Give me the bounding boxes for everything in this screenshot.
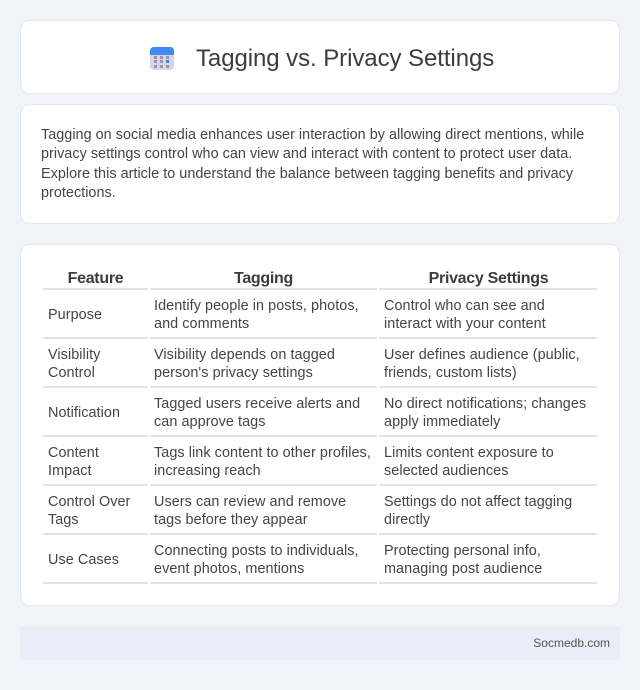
- row: Visibility Control: Control: [48, 365, 95, 381]
- icon: calendar: [150, 47, 174, 70]
- row: Use Cases: Use Cases: [48, 552, 119, 568]
- intro text: Tagging on social media enhances user interaction by allowing direct mentions, while: [41, 127, 584, 143]
- row: Content Impact: [48, 445, 554, 479]
- panel: intro: [20, 104, 620, 224]
- row: Control Over Tags: directly: [384, 512, 430, 528]
- row: Content Impact: Impact: [48, 463, 92, 479]
- intro text: Explore this article to understand the balance between tagging benefits and privacy: [41, 166, 573, 182]
- row: Notification: [48, 396, 586, 430]
- row: Purpose: and comments: [154, 316, 249, 332]
- row: Control Over Tags: [48, 494, 572, 528]
- row: Content Impact: selected audiences: [384, 463, 508, 479]
- table header: Tagging: [234, 270, 293, 287]
- row: Visibility Control: User defines audience (public,: [384, 347, 580, 363]
- row: Control Over Tags: Tags: [48, 512, 79, 528]
- row: Notification: No direct notifications; changes: [384, 396, 586, 412]
- row: Visibility Control: Visibility depends on tagged: [154, 347, 335, 363]
- row: Use Cases: managing post audience: [384, 561, 542, 577]
- row: Visibility Control: Visibility: [48, 347, 100, 363]
- row: Purpose: Purpose: [48, 307, 102, 323]
- panel: title card: [20, 20, 620, 94]
- row: Use Cases: Connecting posts to individuals,: [154, 543, 359, 559]
- row: Notification: Tagged users receive alerts and: [154, 396, 360, 412]
- row: Visibility Control: person's privacy settings: [154, 365, 313, 381]
- footer credit: Socmedb.com: [533, 636, 610, 650]
- row: Content Impact: Content: [48, 445, 99, 461]
- row: Notification: can approve tags: [154, 414, 266, 430]
- table header: Feature: [68, 270, 123, 287]
- row: Control Over Tags: Users can review and remove: [154, 494, 346, 510]
- footer bar: [20, 626, 620, 660]
- table header: [68, 270, 548, 287]
- row: Use Cases: [48, 543, 542, 577]
- row: Purpose: interact with your content: [384, 316, 546, 332]
- row: Content Impact: increasing reach: [154, 463, 261, 479]
- row: Use Cases: Protecting personal info,: [384, 543, 541, 559]
- row: Purpose: Identify people in posts, photos,: [154, 298, 359, 314]
- row: Notification: apply immediately: [384, 414, 500, 430]
- row: Use Cases: event photos, mentions: [154, 561, 304, 577]
- row: Visibility Control: friends, custom lists): [384, 365, 517, 381]
- row: Purpose: [48, 298, 546, 332]
- table: [68, 270, 548, 287]
- row: Notification: Notification: [48, 405, 120, 421]
- title: Tagging vs. Privacy Settings: [196, 45, 494, 72]
- intro text: privacy settings control who can view and interact with content to protect user data.: [41, 146, 572, 162]
- table header: Privacy Settings: [429, 270, 548, 287]
- panel: comparison table: [20, 244, 620, 606]
- row: Visibility Control: [48, 347, 580, 381]
- row: Content Impact: Limits content exposure to: [384, 445, 554, 461]
- row: Control Over Tags: tags before they appear: [154, 512, 308, 528]
- intro text: [41, 127, 584, 201]
- row: Purpose: Control who can see and: [384, 298, 545, 314]
- row: Content Impact: Tags link content to other profiles,: [154, 445, 371, 461]
- row: Control Over Tags: Control Over: [48, 494, 130, 510]
- intro text: protections.: [41, 185, 116, 201]
- row: Control Over Tags: Settings do not affect tagging: [384, 494, 572, 510]
